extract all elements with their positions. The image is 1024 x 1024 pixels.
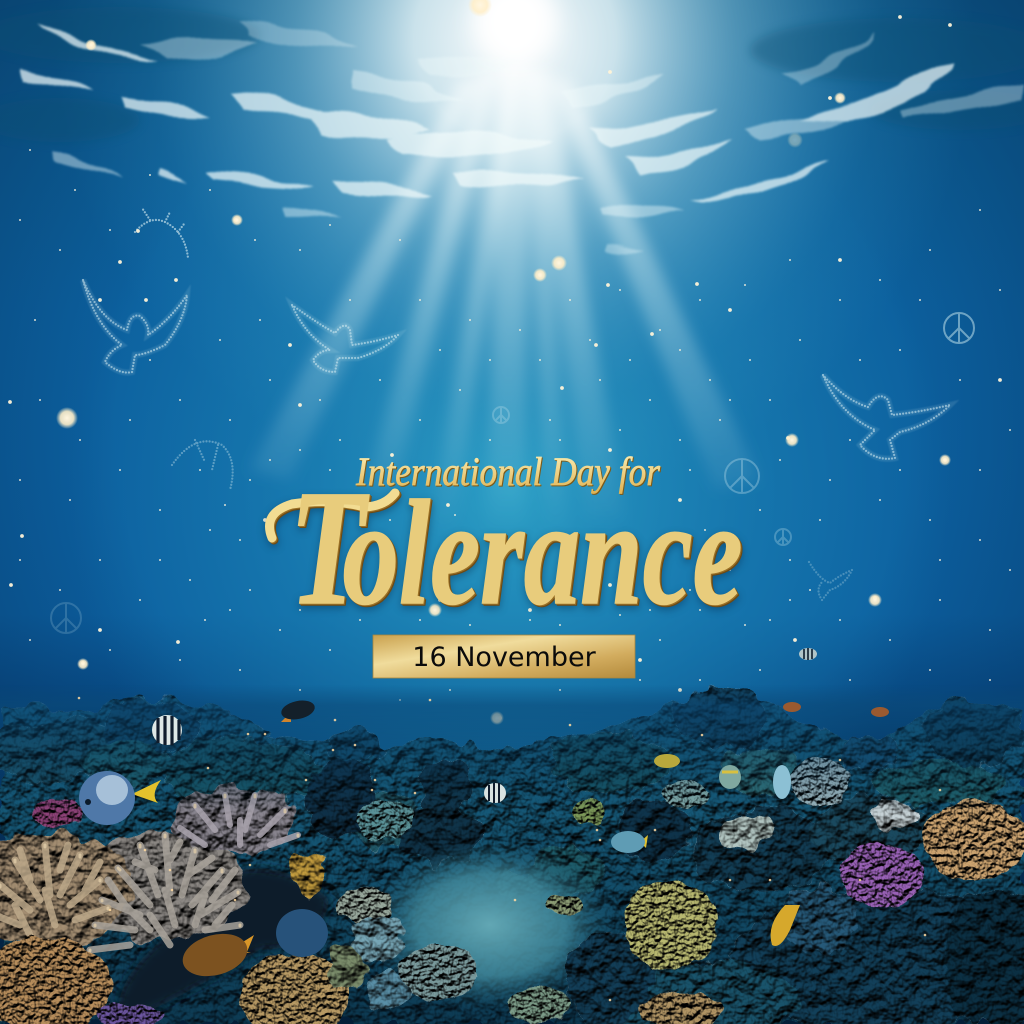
- fish: blue angelfish: [79, 771, 161, 825]
- title: Tolerance: T: [290, 456, 369, 639]
- depth haze over reef: [0, 685, 1024, 1024]
- fish: orange tang: [178, 927, 254, 983]
- fish: pale blue: [773, 765, 791, 799]
- fish: striped left: [152, 715, 182, 745]
- peace symbol: centre small: [493, 407, 509, 423]
- olive branch: upper left: [135, 208, 188, 258]
- fish: far striped: [799, 648, 817, 660]
- peace symbol: right: [944, 313, 974, 343]
- coral reef: [0, 685, 1024, 1024]
- front right rocks: [566, 796, 1024, 1024]
- smooth boulders: [289, 799, 916, 1010]
- left coral mass: [0, 786, 297, 948]
- fish: far orange left: [783, 702, 801, 712]
- fish: blue round: [276, 909, 328, 957]
- fish: striped mid right: [719, 765, 741, 789]
- title block: [270, 449, 742, 678]
- light rays from the surface: [250, 60, 760, 560]
- brain corals: [96, 757, 1024, 1024]
- date plate: 16 November: [412, 642, 597, 673]
- sandy seabed: [365, 840, 615, 1010]
- fish: dark wrasse: [280, 698, 316, 722]
- distant reef silhouette: [0, 694, 1024, 1024]
- fish: yellow small: [654, 754, 680, 768]
- dark shadow beside left corals: [118, 868, 330, 1024]
- title: International Day for: International Day for: [355, 449, 660, 494]
- dove: right: [823, 375, 950, 459]
- peace symbol: lower left: [51, 603, 81, 633]
- fish: [79, 648, 889, 983]
- bottom darkening: [0, 790, 1024, 1024]
- dove: centre left: [292, 305, 398, 372]
- fish: far orange right: [871, 707, 889, 717]
- water surface caustics: [0, 0, 1024, 251]
- lower left and centre bumpy corals: [0, 800, 478, 1024]
- peace symbol: right small: [775, 529, 791, 545]
- mid reef mounds: [0, 687, 1024, 899]
- fish: small blue with yellow tail: [611, 831, 648, 853]
- dove: upper left: [83, 280, 187, 373]
- floating particles: [10, 0, 1010, 725]
- fish: striped small centre: [484, 783, 506, 803]
- peace doves and symbols traced in bubbles: [83, 208, 950, 600]
- peace symbols: [51, 313, 974, 633]
- left coral branches: [0, 795, 298, 951]
- sunlit sparkles on reef: [79, 698, 940, 1000]
- small dove: lower right: [809, 562, 852, 600]
- title: Tolerance: olerance: [343, 469, 742, 636]
- decorative flourish on the T: [270, 493, 395, 538]
- date plate: [373, 635, 635, 678]
- large glowing bubbles: [56, 407, 78, 429]
- olive branch: lower left: [172, 440, 233, 490]
- peace symbol: beside title: [725, 459, 759, 493]
- fish: yellow lower right: [771, 905, 800, 946]
